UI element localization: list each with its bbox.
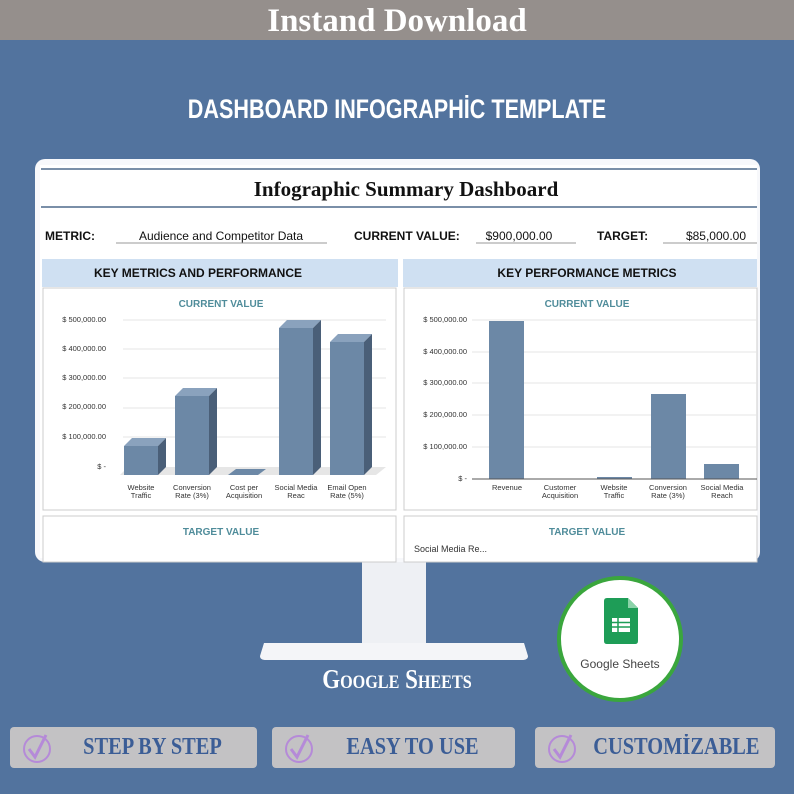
right chart: Reach: [711, 491, 733, 500]
button: easy to use: [272, 727, 515, 768]
right chart: Acquisition: [542, 491, 578, 500]
left chart: Rate (3%): [175, 491, 209, 500]
left chart: $ 400,000.00: [62, 344, 106, 353]
left chart: $ 300,000.00: [62, 373, 106, 382]
metric row: TARGET:: [597, 229, 648, 243]
top banner: Instand Download: [267, 3, 527, 39]
top banner: [0, 0, 794, 40]
left chart: $ 200,000.00: [62, 402, 106, 411]
panel: right header: [403, 259, 757, 287]
left chart: Rate (5%): [330, 491, 364, 500]
right chart: Rate (3%): [651, 491, 685, 500]
button: customizable: CUSTOMİZABLE: [593, 734, 760, 760]
metric row: Audience and Competitor Data: [139, 229, 303, 243]
left chart: $ 100,000.00: [62, 432, 106, 441]
left chart: Social Media: [275, 483, 318, 492]
left chart: Website: [128, 483, 154, 492]
right chart: $ 500,000.00: [423, 315, 467, 324]
subtitle: DASHBOARD INFOGRAPHİC TEMPLATE: [188, 94, 606, 124]
right target box: [404, 516, 757, 562]
button: customizable: [535, 727, 775, 768]
left chart: Conversion: [173, 483, 211, 492]
left chart: Traffic: [131, 491, 151, 500]
left target box: TARGET VALUE: [183, 527, 259, 538]
metric row: $85,000.00: [686, 229, 746, 243]
right chart: Conversion: [649, 483, 687, 492]
metric row: [45, 229, 757, 243]
metric row: METRIC:: [45, 229, 95, 243]
google sheets badge: Google Sheets: [580, 657, 660, 671]
button: step by step: [10, 727, 257, 768]
metric row: $900,000.00: [486, 229, 553, 243]
right chart: $ 400,000.00: [423, 347, 467, 356]
left chart: Reac: [287, 491, 305, 500]
button: easy to use: EASY TO USE: [346, 734, 479, 760]
left chart: CURRENT VALUE: [179, 299, 264, 310]
right chart: Customer: [544, 483, 577, 492]
panel: left header: KEY METRICS AND PERFORMANCE: [94, 266, 302, 280]
right chart: $ -: [458, 474, 467, 483]
right chart: Revenue: [492, 483, 522, 492]
left chart: [43, 288, 396, 510]
dashboard title: Infographic Summary Dashboard: [254, 177, 559, 201]
stand: [260, 560, 528, 660]
left chart: $ 500,000.00: [62, 315, 106, 324]
right chart: Social Media: [701, 483, 744, 492]
right target box: Social Media Re...: [414, 544, 487, 554]
left chart: Acquisition: [226, 491, 262, 500]
button: step by step: STEP BY STEP: [83, 734, 222, 760]
google sheets badge: [557, 576, 683, 702]
left target box: [43, 516, 396, 562]
right chart: $ 300,000.00: [423, 378, 467, 387]
right target box: TARGET VALUE: [549, 527, 625, 538]
right chart: Website: [601, 483, 627, 492]
panel: left header: [42, 259, 398, 287]
right chart: Traffic: [604, 491, 624, 500]
right chart: [404, 288, 757, 510]
caption: google sheets: Google Sheets: [322, 664, 472, 694]
right chart: $ 100,000.00: [423, 442, 467, 451]
right chart: CURRENT VALUE: [545, 299, 630, 310]
right chart: $ 200,000.00: [423, 410, 467, 419]
metric row: CURRENT VALUE:: [354, 229, 460, 243]
panel: right header: KEY PERFORMANCE METRICS: [497, 266, 677, 280]
left chart: Email Open: [327, 483, 367, 492]
left chart: $ -: [97, 462, 106, 471]
left chart: Cost per: [230, 483, 259, 492]
icon: sheets: [604, 598, 638, 644]
screen frame: [35, 159, 760, 562]
